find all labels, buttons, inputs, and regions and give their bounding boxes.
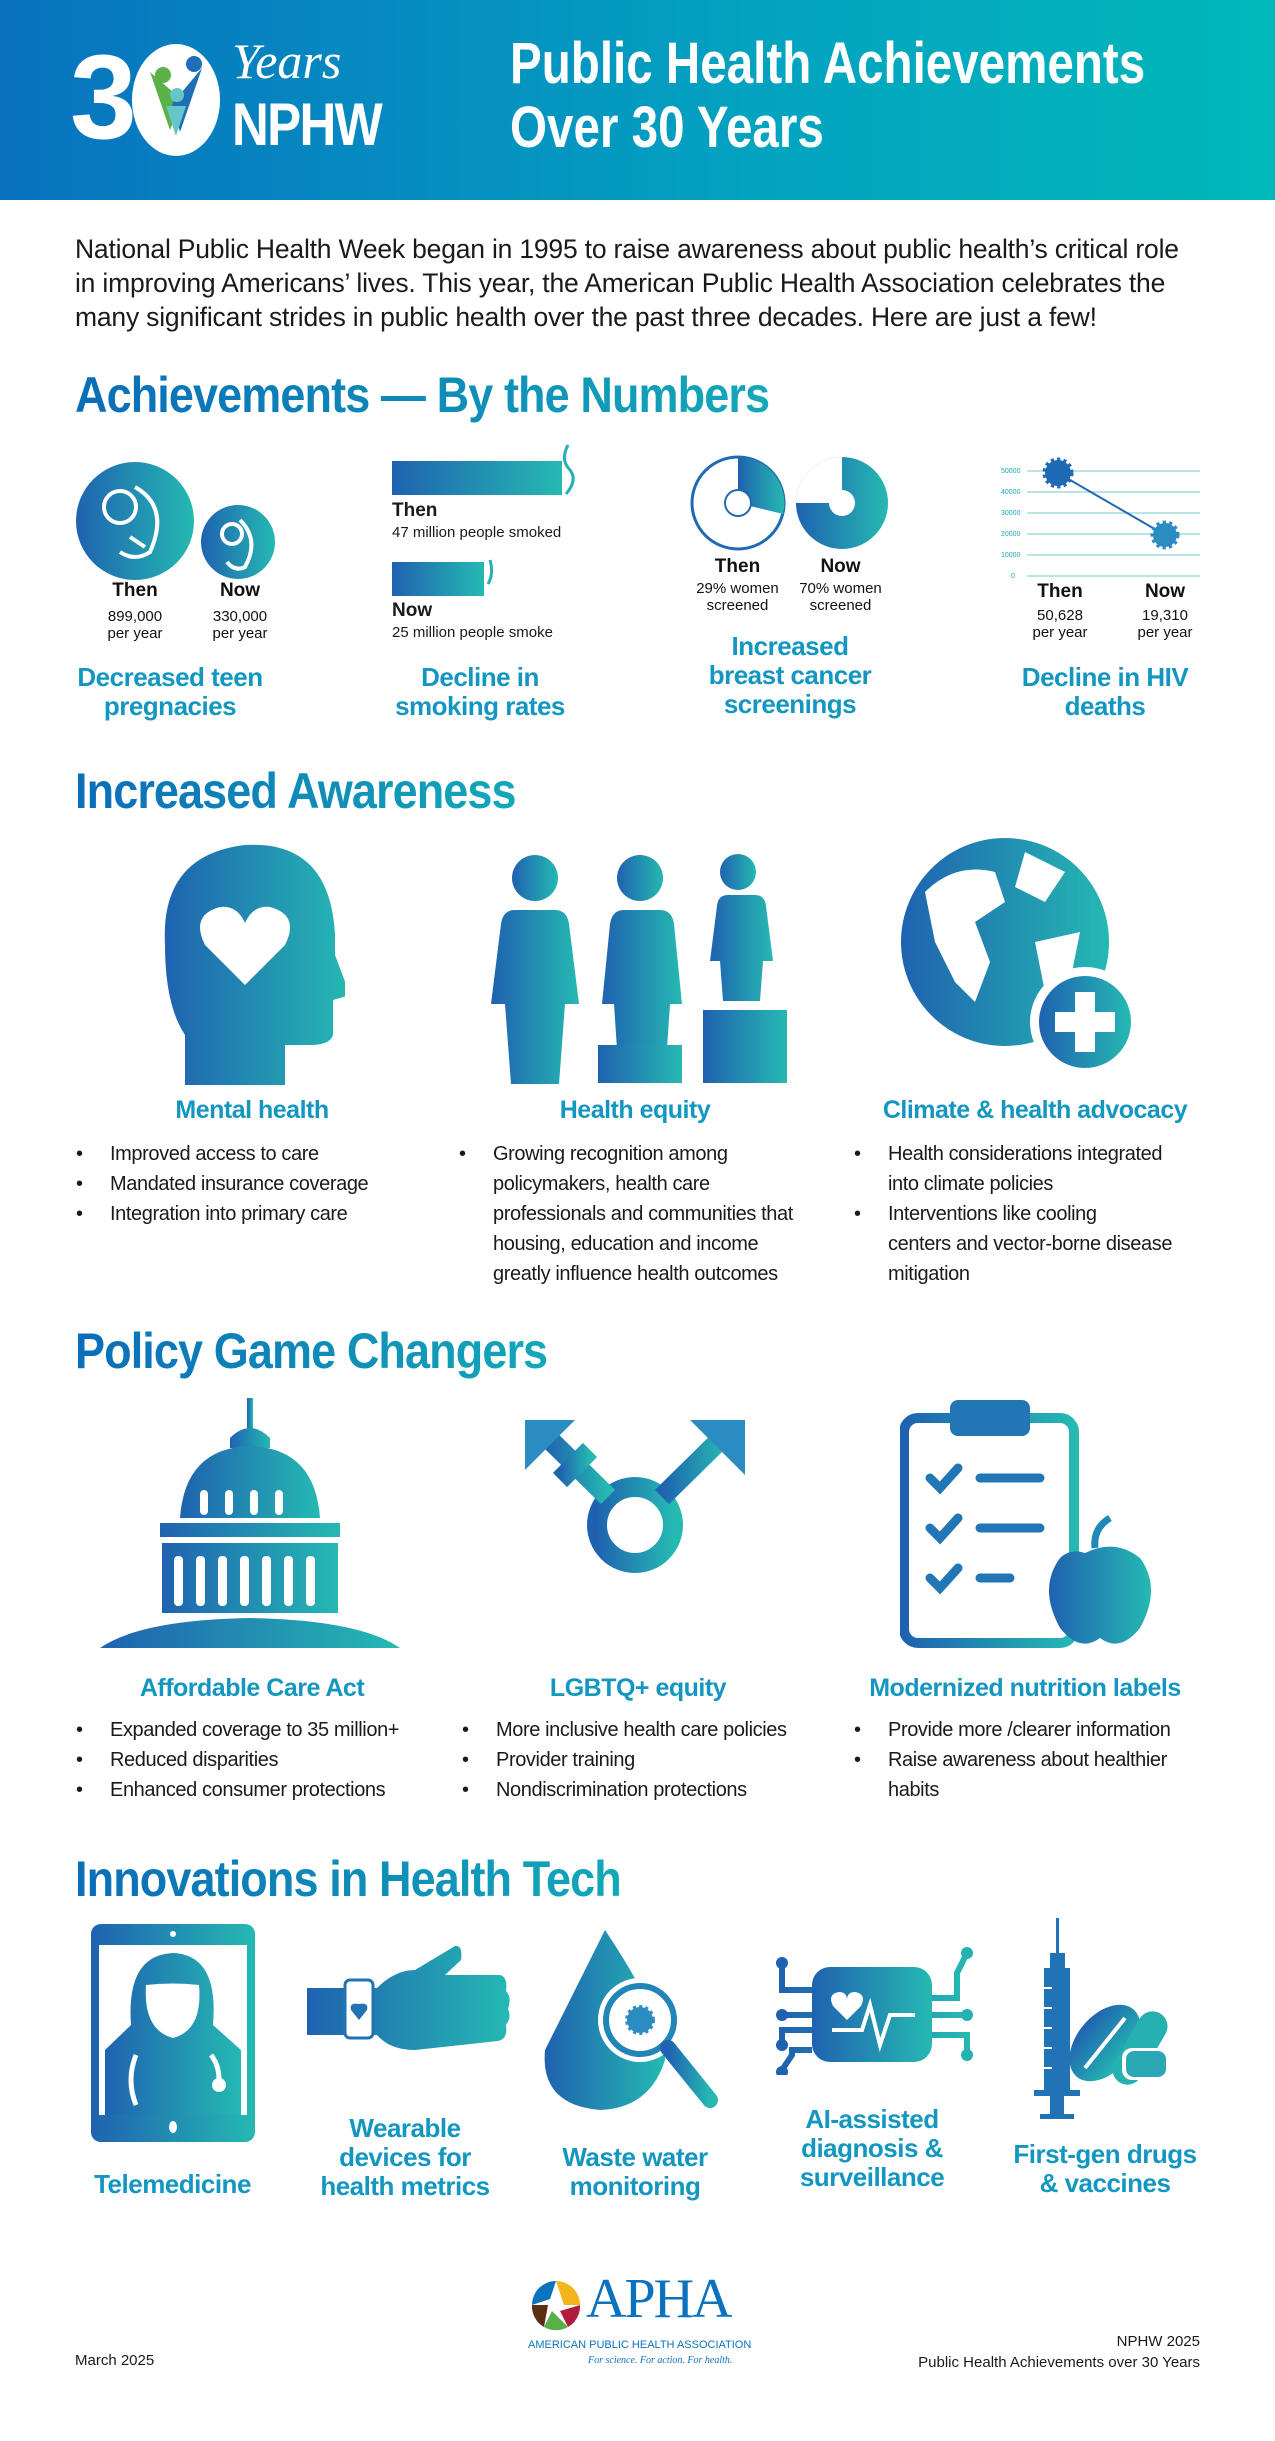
panel: HIV deaths: 50,628 bbox=[1037, 607, 1083, 624]
heading: Innovations in Health Tech: Innovations in Health Tech bbox=[75, 1851, 621, 1907]
panel: ACA: Reduced disparities bbox=[110, 1749, 278, 1771]
logo: 30 Years NPHW: 3 bbox=[70, 30, 129, 164]
chart: HIV line: 0 bbox=[1011, 573, 1015, 580]
footer: right note: Public Health Achievements over 30 Years bbox=[918, 2354, 1200, 2371]
footer: right note: NPHW 2025 bbox=[1117, 2333, 1200, 2350]
tech: wearables bbox=[307, 1946, 510, 2201]
icon: transgender symbol bbox=[525, 1420, 745, 1573]
panel: Mental health: Integration into primary care bbox=[110, 1203, 347, 1225]
heading: Policy Game Changers: Policy Game Changers bbox=[75, 1323, 547, 1379]
chart: HIV line bbox=[1001, 458, 1200, 580]
panel: nutrition labels bbox=[854, 1674, 1181, 1801]
panel: teen pregnancies: Decreased teen pregnacies bbox=[77, 662, 263, 721]
panel: Health equity: professionals and communities that bbox=[493, 1203, 793, 1225]
intro paragraph bbox=[75, 234, 1179, 332]
title bbox=[510, 31, 1145, 160]
heading: Achievements by the numbers: Achievements — By the Numbers bbox=[75, 367, 769, 423]
panel: nutrition labels: Raise awareness about healthier bbox=[888, 1749, 1167, 1771]
icon: globe with plus bbox=[901, 838, 1131, 1068]
panel: LGBTQ+: LGBTQ+ equity bbox=[550, 1674, 726, 1702]
panel: smoking: Decline in smoking rates bbox=[395, 662, 565, 721]
panel: smoking bbox=[392, 444, 575, 721]
panel: Climate: Climate & health advocacy bbox=[883, 1096, 1187, 1124]
panel: LGBTQ+: More inclusive health care policies bbox=[496, 1719, 787, 1741]
chart: HIV line: 30000 bbox=[1001, 510, 1021, 517]
panel: Health equity: housing, education and income bbox=[493, 1233, 758, 1255]
heading: Increased Awareness: Increased Awareness bbox=[75, 763, 516, 819]
panel: Climate: mitigation bbox=[888, 1263, 970, 1285]
panel: breast cancer screenings bbox=[690, 456, 888, 719]
panel: nutrition labels: habits bbox=[888, 1779, 939, 1801]
panel: teen pregnancies: 330,000 bbox=[213, 608, 267, 625]
tech: wastewater: Waste water monitoring bbox=[562, 2142, 708, 2201]
panel: ACA bbox=[76, 1674, 399, 1801]
logo: 30 Years NPHW: NPHW bbox=[232, 91, 381, 158]
chart: HIV line: 50000 bbox=[1001, 468, 1021, 475]
panel: teen pregnancies: 899,000 bbox=[108, 608, 162, 625]
panel: HIV deaths: 19,310 bbox=[1142, 607, 1188, 624]
icon: donut charts bbox=[690, 456, 888, 550]
panel: ACA: Enhanced consumer protections bbox=[110, 1779, 385, 1801]
panel: ACA: Affordable Care Act bbox=[140, 1674, 364, 1702]
logo: 30 Years NPHW: Years bbox=[232, 33, 341, 89]
panel: ACA: Expanded coverage to 35 million+ bbox=[110, 1719, 399, 1741]
panel: HIV deaths: Decline in HIV deaths bbox=[1022, 662, 1188, 721]
panel: smoking: Now bbox=[392, 600, 432, 621]
panel: Health equity: Health equity bbox=[560, 1096, 710, 1124]
panel: Health equity: policymakers, health care bbox=[493, 1173, 710, 1195]
icon: equity people bbox=[491, 854, 787, 1084]
panel: LGBTQ+ bbox=[462, 1674, 787, 1801]
tech: drugs & vaccines: First-gen drugs & vaccines bbox=[1013, 2139, 1197, 2198]
icon: tablet doctor bbox=[91, 1924, 255, 2142]
icon: fetus circles bbox=[76, 462, 275, 580]
icon: wrist with watch bbox=[307, 1946, 510, 2050]
APHA logo bbox=[528, 2268, 751, 2366]
APHA logo: APHA bbox=[586, 2268, 730, 2330]
panel: breast cancer screenings: Increased breast cancer screenings bbox=[709, 631, 871, 719]
panel: Mental health: Mandated insurance coverage bbox=[110, 1173, 368, 1195]
tech: drugs & vaccines bbox=[1013, 1918, 1197, 2198]
panel: teen pregnancies bbox=[76, 462, 275, 721]
panel: Climate: Health considerations integrated bbox=[888, 1143, 1162, 1165]
icon: clipboard with apple bbox=[900, 1400, 1151, 1648]
panel: nutrition labels: Modernized nutrition labels bbox=[869, 1674, 1181, 1702]
panel: teen pregnancies: per year bbox=[212, 625, 268, 642]
panel: teen pregnancies: Then bbox=[112, 580, 158, 601]
panel: HIV deaths: per year bbox=[1032, 624, 1088, 641]
tech: telemedicine: Telemedicine bbox=[94, 2169, 251, 2199]
tech: telemedicine bbox=[91, 1924, 255, 2199]
panel: Health equity: greatly influence health outcomes bbox=[493, 1263, 778, 1285]
panel: HIV deaths: Now bbox=[1145, 581, 1185, 602]
panel: smoking: Then bbox=[392, 500, 437, 521]
panel: Mental health: Mental health bbox=[175, 1096, 329, 1124]
panel: teen pregnancies: Now bbox=[220, 580, 260, 601]
panel: Climate bbox=[854, 1096, 1188, 1285]
logo: 30 Years NPHW bbox=[70, 30, 383, 164]
intro paragraph: National Public Health Week began in 1995 to raise awareness about public health’s critical role bbox=[75, 234, 1179, 264]
panel: teen pregnancies: per year bbox=[107, 625, 163, 642]
panel: smoking: 47 million people smoked bbox=[392, 524, 561, 541]
footer: right note bbox=[918, 2333, 1200, 2371]
header banner bbox=[0, 0, 1275, 200]
panel: Mental health: Improved access to care bbox=[110, 1143, 319, 1165]
panel: breast cancer screenings: 70% women screened bbox=[799, 580, 882, 614]
panel: HIV deaths: per year bbox=[1137, 624, 1193, 641]
panel: HIV deaths: Then bbox=[1037, 581, 1083, 602]
panel: smoking: 25 million people smoke bbox=[392, 624, 553, 641]
panel: Climate: centers and vector-borne disease bbox=[888, 1233, 1172, 1255]
icon: drop with magnifier bbox=[544, 1930, 718, 2110]
icon: head with heart bbox=[164, 844, 345, 1085]
title: Public Health Achievements bbox=[510, 31, 1145, 96]
chart: HIV line: 40000 bbox=[1001, 489, 1021, 496]
panel: breast cancer screenings: 29% women screened bbox=[696, 580, 779, 614]
intro paragraph: many significant strides in public health over the past three decades. Here are just a few! bbox=[75, 302, 1097, 332]
APHA logo: For science. For action. For health. bbox=[588, 2355, 732, 2366]
tech: AI bbox=[776, 1947, 973, 2192]
panel: breast cancer screenings: Now bbox=[820, 556, 861, 577]
panel: Health equity: Growing recognition among bbox=[493, 1143, 728, 1165]
tech: wastewater bbox=[544, 1930, 718, 2201]
panel: Climate: into climate policies bbox=[888, 1173, 1053, 1195]
panel: Health equity bbox=[460, 1096, 794, 1285]
icon: cigarettes bbox=[392, 444, 575, 596]
footer: date: March 2025 bbox=[75, 2352, 154, 2369]
APHA logo: AMERICAN PUBLIC HEALTH ASSOCIATION bbox=[528, 2339, 751, 2351]
tech: AI: AI-assisted diagnosis & surveillance bbox=[800, 2104, 944, 2192]
chart: HIV line: 10000 bbox=[1001, 552, 1021, 559]
panel: Mental health bbox=[76, 1096, 368, 1225]
title: Over 30 Years bbox=[510, 95, 824, 160]
panel: HIV deaths bbox=[1001, 458, 1200, 721]
icon: syringe and pills bbox=[1034, 1918, 1168, 2119]
chart: HIV line: 20000 bbox=[1001, 531, 1021, 538]
icon: capitol bbox=[100, 1398, 400, 1648]
panel: breast cancer screenings: Then bbox=[715, 556, 760, 577]
intro paragraph: in improving Americans’ lives. This year, the American Public Health Association celebrates the bbox=[75, 268, 1165, 298]
panel: Climate: Interventions like cooling bbox=[888, 1203, 1097, 1225]
panel: LGBTQ+: Nondiscrimination protections bbox=[496, 1779, 747, 1801]
panel: LGBTQ+: Provider training bbox=[496, 1749, 635, 1771]
icon: chip with heart bbox=[776, 1947, 973, 2075]
panel: nutrition labels: Provide more /clearer information bbox=[888, 1719, 1170, 1741]
tech: wearables: Wearable devices for health metrics bbox=[320, 2113, 490, 2201]
